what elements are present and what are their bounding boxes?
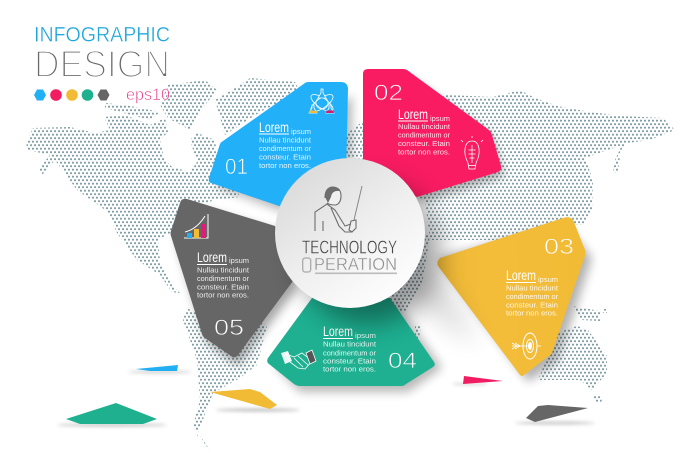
text: 02 copy: ipsum [430,114,450,123]
text: 01 copy: consteur. Etain [259,152,311,162]
text: 04 copy: Lorem [323,324,353,339]
text: 04 copy: consteur. Etain [323,356,376,366]
title: INFOGRAPHIC: INFOGRAPHIC [34,24,170,46]
text: 05 copy: condimentum or [197,274,249,283]
text: 01 copy: condimentum or [259,144,311,153]
text: 04 copy: Nullau tincidunt [323,340,377,348]
text: 05 copy [197,250,250,300]
panel 02 pink [363,69,504,203]
text: 02 copy [398,107,451,156]
text: 04 copy: condimentum or [323,348,376,358]
icon: growth chart [184,214,208,238]
text: 01 copy: Lorem [259,120,289,135]
text: 01 copy: ipsum [291,127,311,136]
number 05: 05 [214,315,244,340]
text: 04 copy [323,324,377,374]
text: 02 copy: consteur. Etain [398,139,450,148]
number 04: 04 [388,348,417,373]
text: OPERATION: PERATION [314,254,397,274]
icon: target and arrow [512,333,541,359]
text: 01 copy: Nullau tincidunt [259,136,312,144]
circle drop shadow [296,180,478,345]
map: North America [26,115,240,293]
text: 03 copy: ipsum [538,275,558,284]
icon: handshake [281,350,316,369]
text: 03 copy: consteur. Etain [506,300,558,310]
number 01: 01 [225,154,248,179]
map: Arctic islands [105,103,160,120]
number 02: 02 [374,80,403,105]
eps10 label: eps10 [126,85,170,104]
panel 03 yellow [437,217,592,382]
text: 05 copy: Nullau tincidunt [197,266,250,274]
text: 01 copy: tortor non eros. [259,161,311,170]
map: Australia [538,326,607,390]
text: 03 copy [506,268,559,318]
text: 03 copy: Nullau tincidunt [506,284,559,292]
text: 03 copy: condimentum or [506,292,558,301]
icon: light bulb [461,136,483,169]
text: 02 copy: Nullau tincidunt [398,122,451,131]
text: 02 copy: tortor non eros. [398,148,450,156]
colour swatches [34,89,110,101]
map: small island [603,309,607,313]
map: Madagascar [415,326,421,338]
map: South America [183,308,267,450]
text: 01 copy [259,120,312,170]
map: Europe and Asia [340,90,675,240]
icon: atom with flasks [308,89,336,115]
text: 05 copy: ipsum [229,256,249,265]
text: TECHNOLOGY: TECHNOLOGY [302,236,397,258]
reflections on the ground [57,365,595,426]
centre circle [275,158,425,308]
panel 05 grey [170,199,298,366]
text: 05 copy: Lorem [197,250,227,265]
map: Indonesia [572,306,600,321]
text: 03 copy: tortor non eros. [506,308,558,318]
map: Greenland and north [160,78,300,135]
panel 01 blue [209,82,352,212]
text: 04 copy: ipsum [355,331,376,340]
map: Tasmania [592,396,602,403]
map: Africa [350,235,430,315]
dotted world map [26,78,675,450]
text: 05 copy: consteur. Etain [197,282,249,292]
text: 05 copy: tortor non eros. [197,290,249,300]
text: 02 copy: Lorem [398,107,428,122]
text: 02 copy: condimentum or [398,130,450,140]
title: DESIGN: DESIGN [34,44,170,86]
number 03: 03 [544,234,574,259]
panel 04 green [267,298,442,392]
text: 03 copy: Lorem [506,268,536,283]
icon: presenter with pointer [315,186,362,232]
text: 04 copy: tortor non eros. [323,364,376,374]
